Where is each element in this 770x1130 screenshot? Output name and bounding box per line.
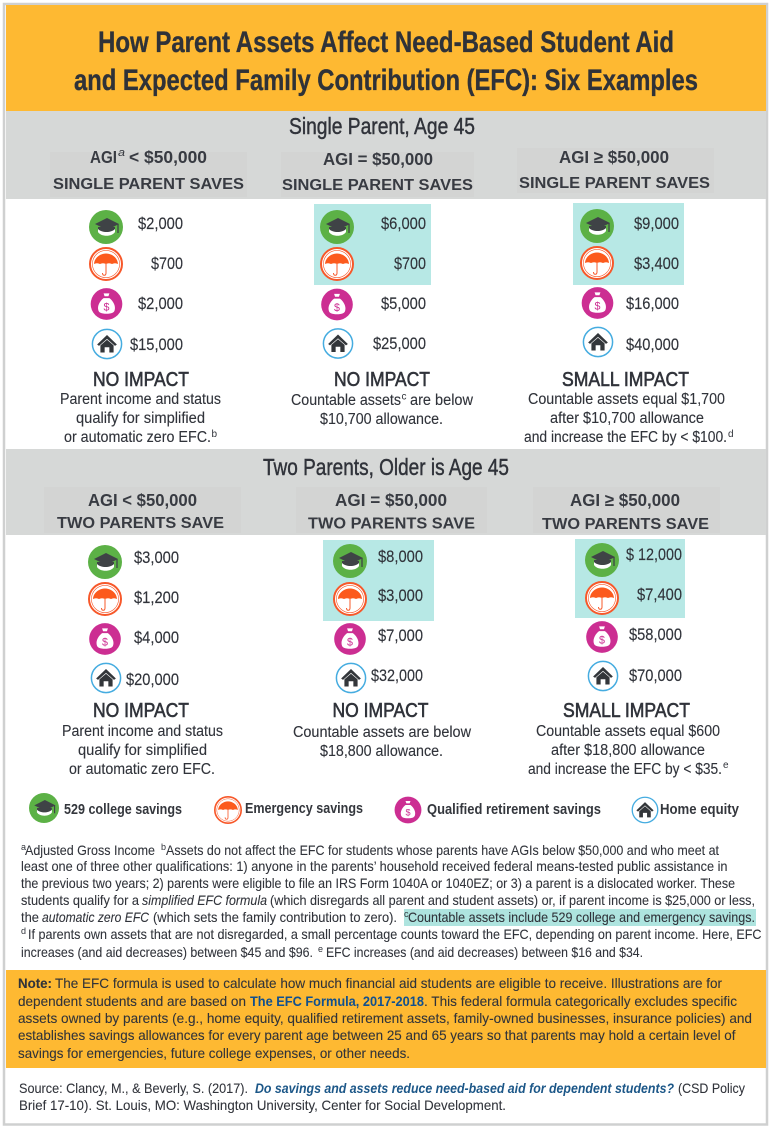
icon: retirement savings: [586, 621, 618, 653]
legend item: emergency savings: Emergency savings: [245, 800, 363, 817]
impact text: or automatic zero EFC.: [69, 761, 215, 778]
amounts: [371, 548, 423, 685]
amounts: $3,000: [378, 587, 423, 605]
impact text: d: [728, 429, 734, 440]
impact text: after $10,700 allowance: [550, 410, 704, 427]
source citation: [19, 1080, 745, 1113]
impact text: c: [402, 392, 406, 402]
icon: 529 college savings: [88, 545, 122, 579]
section header: two parents: AGI ≥ $50,000: [570, 490, 680, 510]
impact text: e: [723, 760, 729, 771]
section header: single parent: a: [118, 147, 125, 159]
impact text: Parent income and status: [60, 391, 221, 408]
impact text: Parent income and status: [62, 723, 223, 740]
footnotes: simplified EFC formula: [142, 892, 267, 908]
panel: single parent AGI below 50000: [60, 210, 221, 446]
impact text: NO IMPACT: [332, 700, 428, 722]
impact text: $18,800 allowance.: [320, 743, 443, 760]
section header: single parent: SINGLE PARENT SAVES: [282, 177, 473, 194]
note panel: savings for emergencies, future college expenses, or other needs.: [18, 1045, 410, 1061]
section header: two parents: TWO PARENTS SAVE: [308, 516, 475, 532]
footnotes: increases (and aid decreases) between $45 and $96.: [21, 944, 313, 960]
icon: retirement savings: [321, 289, 353, 320]
icon: emergency savings: [90, 248, 122, 280]
note panel: The EFC formula is used to calculate how much financial aid students are eligible to receive. Illustrations are for: [55, 975, 722, 991]
highlight: countable assets: [323, 540, 434, 621]
legend item: home equity: [632, 797, 740, 823]
amounts: $7,400: [637, 586, 682, 604]
note panel: establishes savings allowances for every parent age between 25 and 65 years so that parents may hold a certain level of: [18, 1027, 736, 1043]
panel: two parents AGI below 50000: [62, 545, 223, 778]
section header: two parents: Two Parents, Older is Age 45: [263, 454, 509, 480]
legend item: 529 college savings: [29, 793, 182, 823]
footnotes: EFC increases (and aid decreases) between $16 and $34.: [326, 944, 643, 960]
impact text: and increase the EFC by < $100.: [524, 429, 727, 446]
footnotes: Assets do not affect the EFC for students whose parents have AGIs below $50,000 and who meet at: [166, 842, 719, 858]
footnotes: automatic zero EFC: [42, 909, 150, 925]
icon: emergency savings: [586, 582, 618, 614]
impact text: b: [212, 429, 218, 440]
amounts: $16,000: [626, 295, 679, 313]
impact text: and increase the EFC by < $35.: [528, 761, 722, 778]
icon: emergency savings: [334, 583, 366, 615]
icon: retirement savings: [89, 623, 121, 655]
icon: emergency savings: [321, 248, 353, 280]
icon: retirement savings: [91, 288, 122, 320]
icon: retirement savings: [334, 623, 366, 655]
amounts: [373, 215, 426, 353]
amounts: $20,000: [126, 671, 179, 689]
icon: 529 college savings: [89, 210, 123, 244]
note panel: assets owned by parents (e.g., home equity, qualified retirement assets, family-owned businesses, insurance policies) and: [18, 1010, 752, 1026]
note panel: The EFC Formula, 2017-2018: [250, 993, 424, 1009]
amounts: [626, 546, 682, 685]
section header: single parent: AGI: [90, 147, 117, 167]
section header: single parent: [6, 111, 766, 199]
amounts: $58,000: [629, 626, 682, 644]
icon: home equity: [336, 663, 366, 693]
amounts: $3,400: [634, 255, 679, 273]
impact text: [62, 700, 223, 778]
icon: home equity: [91, 663, 121, 693]
section header: single parent: AGI = $50,000: [323, 149, 433, 169]
legend: [29, 793, 740, 823]
impact text: qualify for simplified: [76, 410, 205, 427]
amounts: $1,200: [134, 589, 179, 607]
amounts: $8,000: [378, 548, 423, 566]
legend item: qualified retirement savings: Qualified retirement savings: [427, 801, 601, 818]
section header: two parents: AGI = $50,000: [335, 490, 447, 510]
highlight: countable assets: [314, 204, 431, 285]
amounts: $15,000: [130, 336, 183, 354]
section header: two parents: TWO PARENTS SAVE: [57, 515, 224, 532]
source citation: Brief 17-10). St. Louis, MO: Washington University, Center for Social Development.: [19, 1097, 506, 1113]
section header: single parent: SINGLE PARENT SAVES: [519, 175, 710, 192]
icon: 529 college savings: [320, 210, 354, 244]
icon: retirement savings: [582, 287, 613, 319]
impact text: or automatic zero EFC.: [64, 429, 211, 446]
impact text: after $18,800 allowance: [551, 742, 705, 759]
amounts: $6,000: [381, 215, 426, 233]
amounts: $40,000: [626, 336, 679, 354]
amounts: $4,000: [134, 629, 179, 647]
icon: 529 college savings: [585, 543, 619, 577]
amounts: $ 12,000: [626, 546, 682, 564]
legend item: home equity: Home equity: [660, 801, 740, 818]
legend item: emergency savings: [215, 797, 363, 823]
impact text: NO IMPACT: [334, 369, 430, 391]
impact text: [524, 369, 734, 446]
impact text: [291, 369, 474, 428]
amounts: $32,000: [371, 667, 423, 685]
impact text: $10,700 allowance.: [320, 411, 443, 428]
amounts: $9,000: [634, 215, 679, 233]
amounts: $700: [151, 255, 183, 273]
impact text: qualify for simplified: [78, 742, 207, 759]
note panel: Note:: [18, 975, 52, 991]
panel: two parents AGI equals 50000: [293, 540, 472, 760]
footnotes: [21, 842, 762, 960]
section: two parents: [6, 449, 766, 778]
panel: single parent AGI equals 50000: [291, 204, 474, 428]
icon: emergency savings: [89, 583, 121, 615]
amounts: $25,000: [373, 335, 426, 353]
panel: single parent AGI above 50000: [524, 203, 734, 446]
footnotes: Adjusted Gross Income: [25, 842, 155, 858]
note panel: . This federal formula categorically excludes specific: [424, 993, 737, 1009]
amounts: $700: [394, 255, 426, 273]
footnotes: a: [21, 842, 26, 852]
footnotes: d: [21, 926, 26, 936]
highlight: countable assets: [573, 203, 684, 285]
section header: single parent: < $50,000: [129, 147, 207, 167]
footnotes: the: [21, 909, 39, 925]
section header: two parents: [6, 449, 766, 535]
section header: two parents: AGI < $50,000: [88, 490, 197, 510]
title: [74, 26, 698, 97]
impact text: SMALL IMPACT: [563, 700, 690, 722]
impact text: Countable assets: [291, 392, 401, 409]
impact text: [293, 700, 472, 760]
amounts: [626, 215, 679, 354]
section header: single parent: AGI ≥ $50,000: [559, 147, 669, 167]
impact text: SMALL IMPACT: [562, 369, 689, 391]
title banner: [6, 5, 766, 111]
legend item: 529 college savings: 529 college savings: [64, 801, 182, 818]
icon: 529 college savings: [333, 544, 367, 578]
section header: single parent: Single Parent, Age 45: [289, 113, 475, 139]
amounts: $3,000: [134, 549, 179, 567]
icon: home equity: [323, 329, 353, 358]
amounts: [130, 215, 183, 354]
impact text: Countable assets equal $1,700: [528, 391, 725, 408]
impact text: Countable assets are below: [293, 724, 472, 741]
impact text: NO IMPACT: [93, 369, 189, 391]
section header: two parents: TWO PARENTS SAVE: [542, 516, 709, 533]
impact text: [528, 700, 729, 778]
highlight: countable assets: [575, 539, 685, 618]
source citation: (CSD Policy: [678, 1080, 745, 1096]
section: single parent: [6, 111, 766, 446]
impact text: Countable assets equal $600: [536, 723, 720, 740]
footnotes: (which sets the family contribution to zero).: [153, 909, 397, 925]
note panel: dependent students and are based on: [18, 993, 246, 1009]
amounts: $5,000: [381, 295, 426, 313]
icon: home equity: [92, 329, 122, 359]
icon: emergency savings: [581, 247, 613, 279]
amounts: $2,000: [138, 215, 183, 233]
source citation: Source: Clancy, M., & Beverly, S. (2017).: [19, 1080, 248, 1096]
source citation: Do savings and assets reduce need-based aid for dependent students?: [255, 1080, 674, 1096]
icon: home equity: [583, 327, 613, 357]
impact text: [60, 369, 221, 446]
legend item: qualified retirement savings: [395, 797, 601, 823]
amounts: [126, 549, 179, 689]
panel: two parents AGI above 50000: [528, 539, 729, 778]
section header: single parent: SINGLE PARENT SAVES: [53, 176, 244, 193]
footnotes: e: [318, 944, 323, 954]
note panel: [6, 970, 766, 1068]
icon: home equity: [588, 661, 618, 691]
amounts: $70,000: [629, 667, 682, 685]
amounts: $7,000: [378, 627, 423, 645]
footnotes: c: [404, 909, 409, 919]
impact text: NO IMPACT: [93, 700, 189, 722]
footnotes: b: [161, 842, 166, 852]
icon: 529 college savings: [580, 209, 614, 243]
amounts: $2,000: [138, 295, 183, 313]
impact text: are below: [410, 392, 474, 409]
footnotes: students qualify for a: [21, 892, 139, 908]
